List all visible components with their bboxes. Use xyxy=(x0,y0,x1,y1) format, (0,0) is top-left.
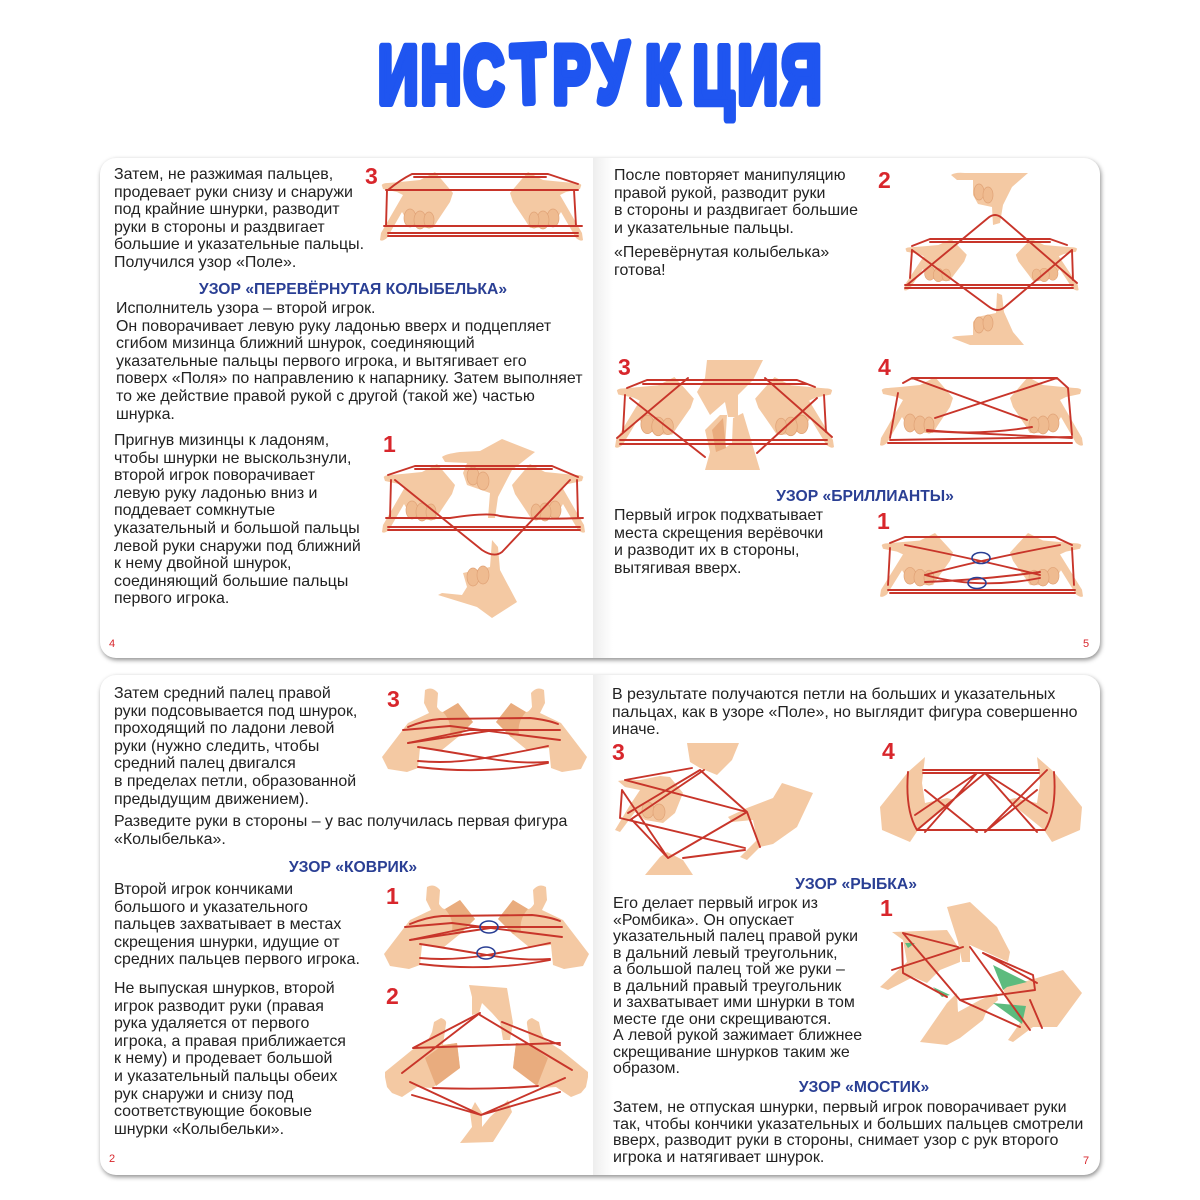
text: diamonds step 1: Первый игрок подхватывает xyxy=(614,507,823,524)
text: middle finger step xyxy=(114,685,357,808)
text: rug step 2: Не выпуская шнурков, второй xyxy=(114,980,335,997)
diagram: inverted cradle step 2 xyxy=(878,167,1079,345)
text: middle finger step: в пределах петли, образованной xyxy=(114,773,356,790)
diagram: inverted cradle step 3 xyxy=(615,354,834,470)
heading: bridge: УЗОР «МОСТИК» xyxy=(799,1079,929,1096)
text: result loops: пальцах, как в узоре «Поле», но выглядит фигура совершенно xyxy=(612,704,1077,721)
text: middle finger step: средний палец двигался xyxy=(114,755,296,772)
text: rug step 1: большого и указательного xyxy=(114,899,308,916)
text: inverted cradle step 1: поддевает сомкнутые xyxy=(114,502,275,519)
text: field pattern intro: под крайние шнурки, разводит xyxy=(114,201,340,218)
icon: right hand xyxy=(1003,970,1082,1042)
page number 2: 2 xyxy=(109,1153,115,1165)
text: result loops xyxy=(612,686,1077,738)
text: fish step 1: месте где они скрещиваются. xyxy=(613,1010,831,1028)
text: fish step 1: Его делает первый игрок из xyxy=(613,895,818,912)
icon: left hand xyxy=(615,776,683,832)
diagram: rug step 2 xyxy=(385,983,588,1143)
page number 4: 4 xyxy=(109,638,115,650)
text: rug step 1: средних пальцев первого игрока. xyxy=(114,951,360,968)
text: field pattern intro xyxy=(114,166,364,270)
diagram: fish step 1 xyxy=(880,895,1082,1045)
text: field pattern intro: большие и указательные пальцы. xyxy=(114,236,364,253)
icon: hand above xyxy=(442,439,535,518)
marker: blue circles xyxy=(968,552,990,588)
icon: top hand xyxy=(687,743,739,775)
diagram: field pattern step 3: 3 xyxy=(365,163,378,189)
diagram: inverted cradle step 4 xyxy=(878,354,1083,446)
text: inverted cradle intro xyxy=(116,300,583,423)
text: fish step 1: а большой палец той же руки – xyxy=(613,961,845,978)
text: rug step 1: пальцев захватывает в местах xyxy=(114,916,341,933)
text: inverted cradle ready xyxy=(614,244,829,279)
diagram: result step 3 xyxy=(612,739,813,875)
text: inverted cradle step 1: второй игрок поворачивает xyxy=(114,467,315,484)
text: rug step 2: соответствующие боковые xyxy=(114,1103,312,1120)
text: fish step 1: скрещивание шнурков таким же xyxy=(613,1044,850,1060)
text: fish step 1: «Ромбика». Он опускает xyxy=(613,912,794,928)
text: field pattern intro: Затем, не разжимая пальцев, xyxy=(114,166,333,183)
text: first figure cradle xyxy=(114,813,568,848)
diagram: rug step 1: 1 xyxy=(386,883,399,909)
text: rug step 2: шнурки «Колыбельки». xyxy=(114,1121,284,1138)
text: fish step 1 xyxy=(613,895,862,1077)
text: inverted cradle step 1: первого игрока. xyxy=(114,590,229,607)
icon: bottom hand xyxy=(645,852,693,875)
text: inverted cradle step 1 xyxy=(114,432,361,607)
heading: rug: УЗОР «КОВРИК» xyxy=(289,859,417,876)
diagram: inverted cradle step 4: 4 xyxy=(878,354,891,380)
diagram: result step 4: 4 xyxy=(882,738,895,764)
text: fish step 1: и захватывает ими шнурки в том xyxy=(613,994,855,1011)
marker: blue circles xyxy=(477,921,498,959)
text: rug step 1 xyxy=(114,881,360,968)
diagram: rug step 1 xyxy=(384,883,589,969)
text: first figure cradle: «Колыбелька». xyxy=(114,831,226,848)
icon: top hand xyxy=(947,902,1010,962)
text: inverted cradle step 1: левую руку ладонью вниз и xyxy=(114,485,317,502)
text: fish step 1: в дальний правый треугольник xyxy=(613,978,841,994)
text: fish step 1: в дальний левый треугольник, xyxy=(613,944,838,962)
text: repeat with right hand: правой рукой, разводит руки xyxy=(614,185,825,202)
text: rug step 1: скрещения шнурки, идущие от xyxy=(114,934,340,951)
text: inverted cradle intro: то же действие правой рукой с другой (такой же) частью xyxy=(116,388,535,405)
text: inverted cradle step 1: указательный и большой пальцы xyxy=(114,520,360,537)
text: middle finger step: проходящий по ладони левой xyxy=(114,720,334,737)
diagram: fish step 1: 1 xyxy=(880,895,893,921)
text: inverted cradle step 1: к нему двойной шнурок, xyxy=(114,555,291,572)
text: middle finger step: руки (нужно следить, чтобы xyxy=(114,738,319,755)
text: rug step 2: игрока, а правая приближается xyxy=(114,1033,346,1050)
text: bridge description: Затем, не отпуская шнурки, первый игрок поворачивает руки xyxy=(613,1098,1067,1116)
diagram: result step 4 xyxy=(880,738,1082,842)
text: rug step 2: рук снаружи и снизу под xyxy=(114,1086,293,1103)
heading: diamonds: УЗОР «БРИЛЛИАНТЫ» xyxy=(776,488,954,505)
text: repeat with right hand xyxy=(614,167,858,237)
icon: bottom hand xyxy=(920,993,998,1045)
text: inverted cradle intro: Он поворачивает левую руку ладонью вверх и подцепляет xyxy=(116,318,551,335)
text: result loops: иначе. xyxy=(612,721,660,738)
text: rug step 2: игрок разводит руки (правая xyxy=(114,998,324,1015)
text: rug step 2: и указательный пальцы обеих xyxy=(114,1068,337,1085)
text: bridge description: так, чтобы кончики указательных и больших пальцев смотрели xyxy=(613,1115,1083,1133)
text: diamonds step 1: вытягивая вверх. xyxy=(614,560,741,577)
text: inverted cradle ready: «Перевёрнутая колыбелька» xyxy=(614,244,829,261)
icon: hand below xyxy=(952,293,1024,345)
text: bridge description: вверх, разводит руки в стороны, снимает узор с рук второго xyxy=(613,1131,1058,1149)
diagram: inverted cradle step 2: 2 xyxy=(878,167,891,193)
text: inverted cradle step 1: левой руки снаружи под ближний xyxy=(114,538,361,555)
text: diamonds step 1: и разводит их в стороны, xyxy=(614,542,799,559)
text: diamonds step 1 xyxy=(614,507,823,577)
text: inverted cradle intro: сгибом мизинца ближний шнурок, соединяющий xyxy=(116,335,475,352)
text: result loops: В результате получаются петли на больших и указательных xyxy=(612,686,1055,703)
text: rug step 2: рука удаляется от первого xyxy=(114,1015,309,1032)
text: inverted cradle step 1: соединяющий большие пальцы xyxy=(114,573,348,590)
diagram: diamonds step 1 xyxy=(877,508,1083,597)
diagram: rug step 2: 2 xyxy=(386,983,399,1009)
text: field pattern intro: продевает руки снизу и снаружи xyxy=(114,184,353,200)
icon: hand below xyxy=(460,1100,512,1143)
text: inverted cradle intro: указательные пальцы первого игрока, и вытягивает его xyxy=(116,353,527,370)
icon: right hand xyxy=(728,783,813,860)
icon: centre hands xyxy=(697,360,763,470)
heading: inverted cradle: УЗОР «ПЕРЕВЁРНУТАЯ КОЛЫБЕЛЬКА» xyxy=(199,281,507,298)
text: middle finger step: руки подсовывается под шнурок, xyxy=(114,703,357,720)
diagram: diamonds step 1: 1 xyxy=(877,508,890,534)
diagram: inverted cradle step 1 xyxy=(382,431,585,618)
text: bridge description: игрока и натягивает шнурок. xyxy=(613,1148,824,1166)
diagram: field pattern step 3 xyxy=(365,163,583,241)
text: middle finger step: предыдущим движением). xyxy=(114,791,309,808)
text: repeat with right hand: в стороны и раздвигает большие xyxy=(614,202,858,219)
text: diamonds step 1: места скрещения верёвочки xyxy=(614,525,823,542)
diagram: cradle step 3: 3 xyxy=(387,686,400,712)
text: rug step 2 xyxy=(114,980,346,1138)
text: field pattern intro: Получился узор «Поле». xyxy=(114,254,296,270)
heading: fish: УЗОР «РЫБКА» xyxy=(795,876,917,893)
icon: hand above xyxy=(951,173,1028,225)
text: rug step 2: к нему) и продевает большой xyxy=(114,1050,332,1067)
green triangles xyxy=(905,943,1027,1024)
text: inverted cradle intro: поверх «Поля» по направлению к напарнику. Затем выполняет xyxy=(116,370,583,387)
diagram: inverted cradle step 3: 3 xyxy=(618,354,631,380)
text: inverted cradle ready: готова! xyxy=(614,262,666,279)
icon: left hand xyxy=(880,930,960,990)
icon: hand below xyxy=(438,540,517,618)
text: fish step 1: указательный палец правой руки xyxy=(613,928,858,945)
text: middle finger step: Затем средний палец правой xyxy=(114,685,331,702)
icon: hand above xyxy=(469,985,513,1040)
text: bridge description xyxy=(613,1098,1083,1166)
text: inverted cradle intro: Исполнитель узора – второй игрок. xyxy=(116,300,375,317)
text: inverted cradle intro: шнурка. xyxy=(116,406,175,423)
text: field pattern intro: руки в стороны и раздвигает xyxy=(114,218,325,236)
text: repeat with right hand: После повторяет манипуляцию xyxy=(614,167,846,184)
page number 5: 5 xyxy=(1083,638,1089,650)
text: repeat with right hand: и указательные пальцы. xyxy=(614,220,794,237)
title: ИНСТРУКЦИЯ xyxy=(378,25,821,121)
page number 7: 7 xyxy=(1083,1155,1089,1167)
text: fish step 1: А левой рукой зажимает ближнее xyxy=(613,1027,862,1044)
diagram: result step 3: 3 xyxy=(612,739,625,765)
text: inverted cradle step 1: Пригнув мизинцы к ладоням, xyxy=(114,432,329,449)
diagram: cradle step 3 xyxy=(382,686,587,772)
text: inverted cradle step 1: чтобы шнурки не выскользнули, xyxy=(114,450,351,467)
text: fish step 1: образом. xyxy=(613,1060,680,1077)
panel: upper spread xyxy=(100,158,1100,658)
text: rug step 1: Второй игрок кончиками xyxy=(114,881,293,898)
diagram: inverted cradle step 1: 1 xyxy=(383,431,396,457)
panel: lower spread xyxy=(100,675,1100,1175)
text: first figure cradle: Разведите руки в стороны – у вас получилась первая фигура xyxy=(114,813,567,830)
